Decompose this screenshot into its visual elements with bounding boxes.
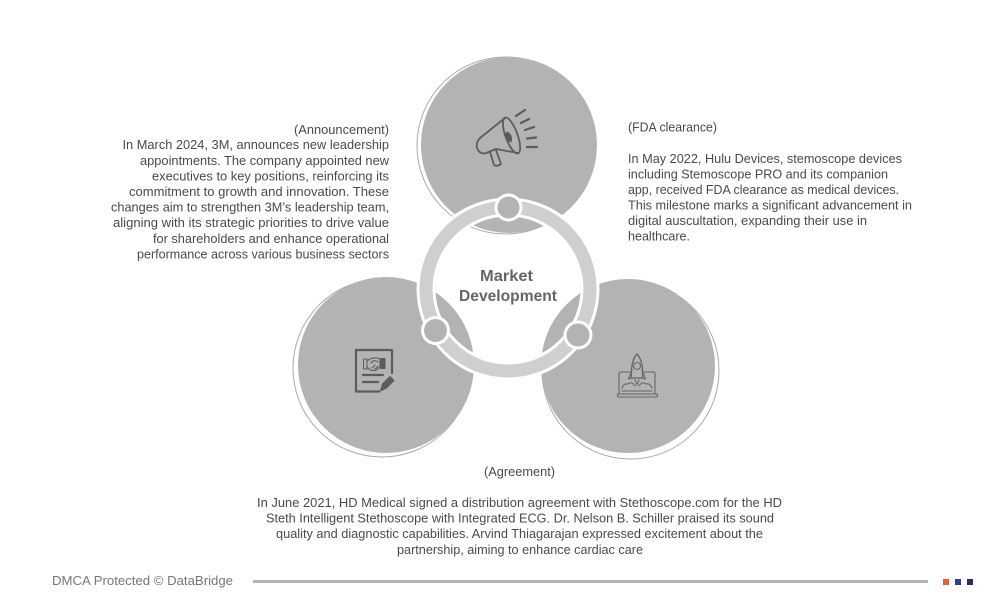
text block: agreement	[257, 465, 782, 557]
text block: FDA clearance: In May 2022, Hulu Devices, stemoscope devices	[628, 152, 902, 166]
text block: FDA clearance: app, received FDA clearance as medical devices.	[628, 183, 899, 197]
panel: top circle	[417, 57, 597, 234]
text block: agreement: In June 2021, HD Medical signed a distribution agreement with Stethoscope.com for the HD	[257, 496, 782, 510]
text block: FDA clearance: This milestone marks a significant advancement in	[628, 198, 912, 212]
text block: announcement	[111, 123, 390, 262]
panel: right circle	[541, 279, 719, 459]
text block: FDA clearance: digital auscultation, expanding their use in	[628, 214, 867, 228]
icon: megaphone	[477, 110, 537, 166]
text block: announcement: (Announcement)	[294, 123, 389, 137]
node: left ring connector	[421, 316, 450, 345]
footer: copyright text: DMCA Protected © DataBridge	[52, 574, 233, 588]
text block: announcement: changes aim to strengthen 3M’s leadership team,	[111, 200, 389, 214]
title: market development: Market	[480, 268, 533, 285]
text block: FDA clearance: (FDA clearance)	[628, 120, 717, 134]
text block: agreement: Steth Intelligent Stethoscope with Integrated ECG. Dr. Nelson B. Schiller praised its sound	[266, 512, 774, 526]
node: right ring connector	[564, 320, 592, 350]
footer: pagination squares	[943, 579, 973, 585]
text block: FDA clearance	[628, 120, 912, 244]
text block: announcement: for shareholders and enhance operational	[153, 232, 389, 246]
footer: divider bar	[253, 580, 928, 583]
icon: signed agreement document	[356, 350, 394, 392]
text block: announcement: aligning with its strategic priorities to drive value	[113, 216, 389, 230]
text block: FDA clearance: including Stemoscope PRO and its companion	[628, 168, 888, 182]
text block: announcement: appointments. The company appointed new	[140, 154, 390, 168]
text block: agreement: partnership, aiming to enhance cardiac care	[397, 543, 643, 557]
node: top ring connector	[494, 194, 522, 222]
text block: agreement: (Agreement)	[484, 465, 555, 479]
text block: announcement: performance across various business sectors	[137, 248, 389, 262]
text block: announcement: In March 2024, 3M, announces new leadership	[122, 138, 389, 152]
icon: rocket launching from laptop	[618, 354, 658, 397]
text block: announcement: executives to key positions, reinforcing its	[152, 170, 389, 184]
text block: FDA clearance: healthcare.	[628, 230, 690, 244]
title: market development: Development	[459, 288, 557, 305]
text block: announcement: commitment to growth and innovation. These	[129, 185, 389, 199]
text block: agreement: quality and diagnostic capabilities. Arvind Thiagarajan expressed excitement about the	[276, 527, 763, 541]
ring: central market development ring	[426, 207, 590, 371]
title: market development	[459, 268, 557, 305]
panel: left circle	[293, 277, 474, 457]
